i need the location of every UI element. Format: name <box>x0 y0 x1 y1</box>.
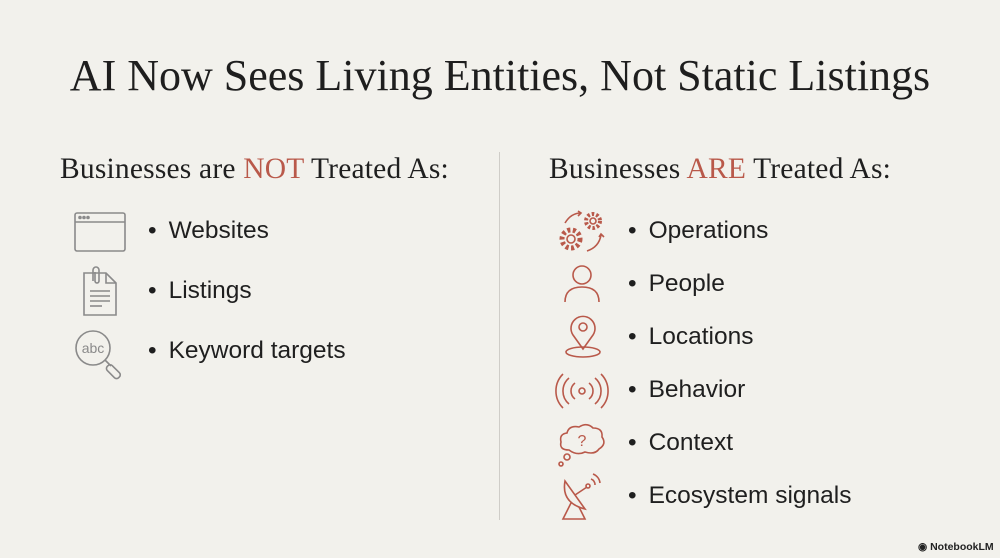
text: keyword targets: • Keyword targets <box>148 337 346 364</box>
text: websites: • Websites <box>148 217 269 244</box>
icon: signal <box>555 373 609 409</box>
icon: magnifier abc: abc <box>82 340 104 356</box>
panel: not list <box>74 212 346 380</box>
icon: location pin <box>565 316 601 358</box>
icon: magnifier abc <box>75 330 121 380</box>
icon: thought cloud <box>558 424 605 467</box>
icon: document <box>83 266 117 316</box>
text: locations: • Locations <box>628 323 753 350</box>
text: context: • Context <box>628 429 733 456</box>
icon: satellite dish <box>562 473 601 520</box>
logo: NotebookLM: ◉ NotebookLM <box>918 541 994 553</box>
text: operations: • Operations <box>628 217 768 244</box>
text: listings: • Listings <box>148 277 252 304</box>
icon: browser window <box>74 212 126 252</box>
icon: thought cloud: ? <box>578 433 587 450</box>
icon: person <box>564 265 600 302</box>
panel: are list <box>555 210 851 520</box>
text: people: • People <box>628 270 725 297</box>
title: AI Now Sees Living Entities, Not Static Listings <box>70 51 930 100</box>
icon: gears <box>560 210 604 252</box>
heading: not treated as: Businesses are NOT Treated As: <box>60 153 449 185</box>
divider <box>499 152 500 520</box>
text: ecosystem signals: • Ecosystem signals <box>628 482 851 509</box>
heading: are treated as: Businesses ARE Treated As: <box>549 153 891 185</box>
text: behavior: • Behavior <box>628 376 745 403</box>
